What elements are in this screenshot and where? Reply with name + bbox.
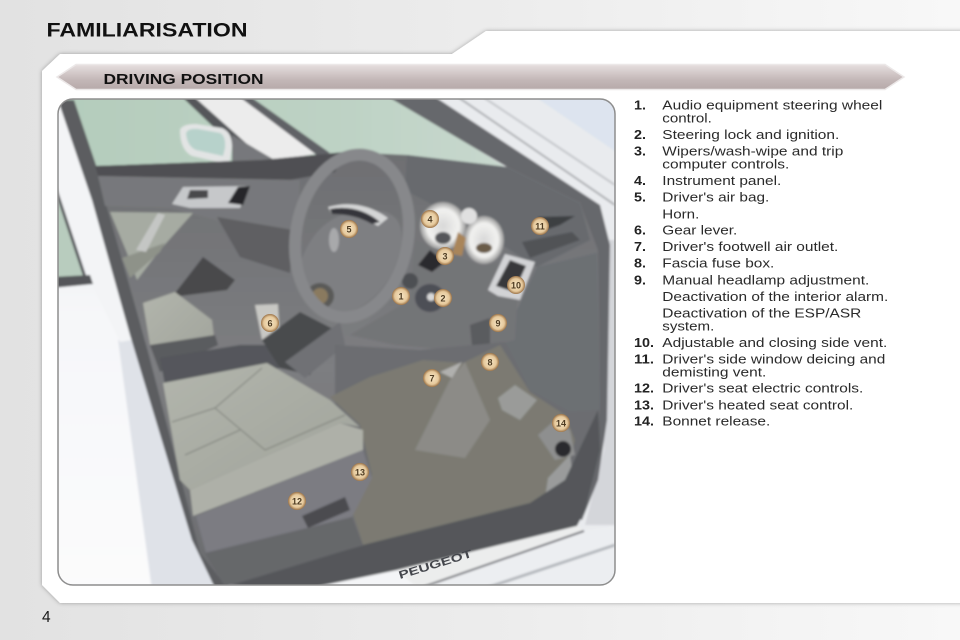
- item 8: 8.: [634, 256, 646, 271]
- item 13: 13.: [634, 397, 654, 412]
- callout 4: 4: [427, 214, 433, 224]
- item 11: [634, 351, 885, 379]
- body sides: [440, 100, 614, 529]
- item 9: Manual headlamp adjustment.: [662, 272, 869, 287]
- item 3: 3.: [634, 143, 646, 158]
- door sill logo: PEUGEOT: [397, 548, 474, 582]
- callout 9: [489, 314, 507, 332]
- callout 10: [507, 276, 525, 294]
- item 5: Driver's air bag.: [662, 190, 769, 205]
- callout 3: [436, 247, 454, 265]
- item 4: 4.: [634, 173, 646, 188]
- callout 1: [392, 287, 410, 305]
- callout 2: 2: [440, 294, 446, 304]
- item 5: 5.: [634, 190, 646, 205]
- item 11: 11.: [634, 351, 654, 366]
- callout 11: [531, 217, 549, 235]
- item 13: Driver's heated seat control.: [662, 397, 853, 412]
- callout 5: [340, 220, 358, 238]
- item 4: Instrument panel.: [662, 173, 781, 188]
- side vent: [488, 254, 535, 300]
- item 3: Wipers/wash-wipe and trip: [662, 143, 843, 158]
- callout 3: 3: [442, 252, 448, 262]
- callout 7: [423, 369, 441, 387]
- callout 5: 5: [346, 224, 352, 234]
- item 6: [634, 223, 737, 238]
- driver seat: [163, 363, 360, 490]
- rear pillar: [196, 100, 316, 160]
- callout 10: 10: [511, 280, 521, 290]
- item 7: Driver's footwell air outlet.: [662, 239, 838, 254]
- page number: 4: [42, 609, 51, 626]
- item 2: 2.: [634, 127, 646, 142]
- item 8: [634, 256, 774, 271]
- white door strip: [59, 154, 127, 342]
- footwell and carpet: [335, 343, 598, 460]
- callout 14: 14: [556, 418, 566, 428]
- callout 12: [288, 492, 306, 510]
- item 9: Deactivation of the ESP/ASR: [662, 305, 861, 320]
- callout 9: 9: [495, 318, 501, 328]
- lower left body: [50, 285, 160, 595]
- item 12: 12.: [634, 381, 654, 396]
- lower left glass: [58, 200, 84, 278]
- item 14: Bonnet release.: [662, 414, 770, 429]
- callout 7: 7: [429, 374, 435, 384]
- left door frame: [58, 100, 230, 590]
- illustration: car interior seen through driver's door: [50, 90, 625, 600]
- callout 13: [351, 463, 369, 481]
- item 3: [634, 143, 843, 171]
- item 9: 9.: [634, 272, 646, 287]
- item 9: [634, 272, 888, 333]
- item 2: Steering lock and ignition.: [662, 127, 839, 142]
- callout 1: 1: [398, 292, 404, 302]
- callout 8: 8: [487, 358, 493, 368]
- item 6: Gear lever.: [662, 223, 737, 238]
- item 11: Driver's side window deicing and: [662, 351, 885, 366]
- number callouts: [261, 210, 570, 510]
- instrument cluster: [420, 202, 466, 250]
- item 4: [634, 173, 781, 188]
- door and cabin base: [95, 152, 600, 585]
- item 1: [634, 97, 882, 126]
- item 9: system.: [662, 318, 714, 333]
- door sill: [225, 410, 600, 590]
- callout 4: [421, 210, 439, 228]
- item 5: [634, 190, 769, 221]
- ignition: [402, 273, 418, 289]
- callout 14: [552, 414, 570, 432]
- item 1: 1.: [634, 97, 646, 112]
- item 14: [634, 414, 770, 429]
- dashboard: [405, 155, 590, 267]
- item 6: 6.: [634, 223, 646, 238]
- item 10: 10.: [634, 335, 654, 350]
- callout 11: 11: [535, 222, 545, 232]
- door mirror: [180, 124, 232, 162]
- item 1: control.: [662, 111, 712, 126]
- title: FAMILIARISATION: [46, 20, 247, 42]
- callout 2: [434, 289, 452, 307]
- window glass: [66, 100, 504, 168]
- item 12: Driver's seat electric controls.: [662, 381, 863, 396]
- item 10: Adjustable and closing side vent.: [662, 335, 887, 350]
- item 3: computer controls.: [662, 156, 789, 171]
- item 5: Horn.: [662, 206, 699, 221]
- banner heading: DRIVING POSITION: [104, 72, 264, 88]
- item 14: 14.: [634, 414, 654, 429]
- item 8: Fascia fuse box.: [662, 256, 774, 271]
- section banner: [57, 64, 904, 90]
- steering wheel: [304, 212, 400, 262]
- numbered legend: [634, 97, 888, 429]
- callout 6: [261, 314, 279, 332]
- callout 12: 12: [292, 496, 302, 506]
- callout 6: 6: [267, 318, 273, 328]
- item 7: 7.: [634, 239, 646, 254]
- item 9: Deactivation of the interior alarm.: [662, 289, 888, 304]
- callout 8: [481, 353, 499, 371]
- item 1: Audio equipment steering wheel: [662, 97, 882, 112]
- dark pillar: [385, 95, 610, 520]
- callout 13: 13: [355, 468, 365, 478]
- item 11: demisting vent.: [662, 364, 766, 379]
